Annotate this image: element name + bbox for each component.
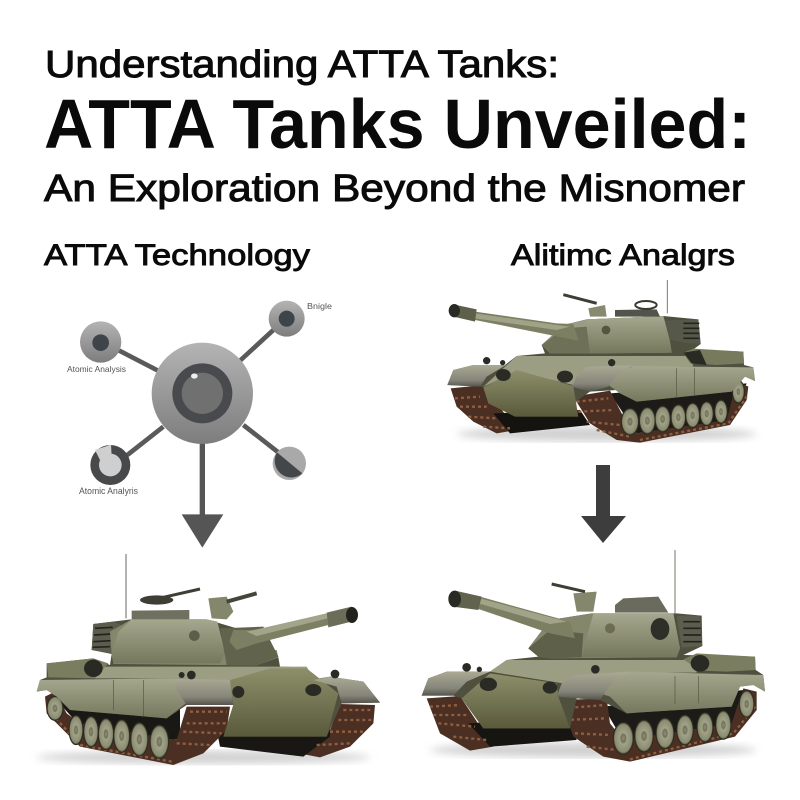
label: Bnigle: Bnigle — [307, 301, 332, 311]
hull silhouette — [422, 613, 765, 728]
subtitle: An Exploration Beyond the Misnomer: An Exploration Beyond the Misnomer — [44, 168, 745, 210]
tank: lower left — [37, 554, 380, 765]
label: Atomic Analysis: Atomic Analysis — [67, 364, 126, 374]
diagram: ATTA technology hub — [80, 301, 306, 548]
arrow: hub down — [182, 442, 223, 548]
title: ATTA Tanks Unveiled: ATTA Tanks Unveiled: — [44, 85, 751, 163]
hull silhouette — [447, 316, 755, 417]
hull silhouette — [37, 619, 380, 737]
icon: node upper right — [269, 301, 305, 337]
icon: central hub — [152, 343, 253, 444]
arrow: right column down — [581, 465, 626, 543]
heading: Alitimc Analgrs: Alitimc Analgrs — [511, 239, 735, 272]
heading: ATTA Technology: ATTA Technology — [44, 239, 310, 272]
icon: node lower right — [273, 447, 306, 480]
title: Understanding ATTA Tanks: Understanding ATTA Tanks: — [45, 44, 559, 86]
tank: upper right — [447, 280, 757, 443]
icon: node upper left — [80, 321, 121, 363]
label: Atomic Analyris: Atomic Analyris — [79, 486, 138, 496]
icon: node lower left — [90, 445, 130, 485]
tank: lower right — [422, 550, 765, 762]
